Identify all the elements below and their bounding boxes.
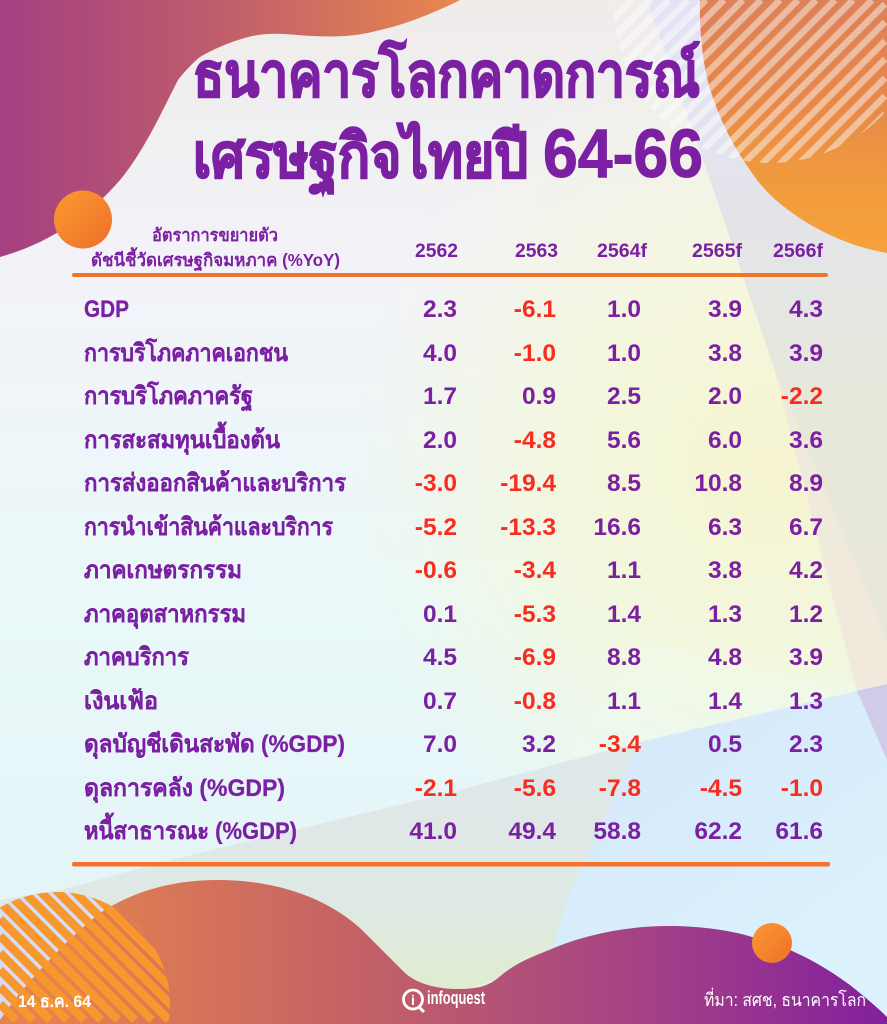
row: imports: -13.3 xyxy=(500,514,556,541)
row: capital formation: 3.6 xyxy=(789,427,823,454)
row: current account xyxy=(84,730,823,760)
row: exports xyxy=(84,470,823,497)
row: fiscal balance: -4.5 xyxy=(700,775,742,802)
row: industry: 1.3 xyxy=(708,601,742,628)
row: agriculture xyxy=(84,557,823,584)
row: industry: ภาคอุตสาหกรรม xyxy=(84,601,246,630)
decorative orange circle: bottom right xyxy=(752,923,792,963)
row: current account: 7.0 xyxy=(423,731,457,758)
header rule xyxy=(72,273,828,277)
row: current account: 3.2 xyxy=(522,731,556,758)
row: GDP: 4.3 xyxy=(789,296,823,323)
striped circle: top right xyxy=(614,0,887,163)
title: เศรษฐกิจไทยปี xyxy=(193,121,528,195)
row: imports: -5.2 xyxy=(415,514,457,541)
row: services: 3.9 xyxy=(789,644,823,671)
row: agriculture: -3.4 xyxy=(514,557,556,584)
table header: 2565f xyxy=(692,240,743,262)
row: GDP xyxy=(84,296,823,323)
row: services: 8.8 xyxy=(607,644,641,671)
row: capital formation: 2.0 xyxy=(423,427,457,454)
row: public debt: 58.8 xyxy=(593,818,641,845)
row: fiscal balance: ดุลการคลัง (%GDP) xyxy=(84,775,285,804)
logo: infoquest: i xyxy=(411,992,415,1008)
row: capital formation xyxy=(84,421,823,456)
row: private consumption: 3.9 xyxy=(789,340,823,367)
row: industry xyxy=(84,601,823,630)
row: private consumption xyxy=(84,338,823,367)
row: GDP: GDP xyxy=(84,296,129,323)
row: current account: -3.4 xyxy=(599,731,641,758)
row: current account: 0.5 xyxy=(708,731,742,758)
row: imports: 6.7 xyxy=(789,514,823,541)
row: GDP: 3.9 xyxy=(708,296,742,323)
row: services: 4.5 xyxy=(423,644,457,671)
title xyxy=(193,39,703,195)
title: 64-66 xyxy=(543,115,703,192)
table header: 2563 xyxy=(515,240,558,262)
row: exports: 8.9 xyxy=(789,470,823,497)
title: ธนาคารโลกคาดการณ์ xyxy=(193,39,700,109)
row: imports: 16.6 xyxy=(593,514,641,541)
footer rule xyxy=(72,862,830,866)
row: inflation: เงินเฟ้อ xyxy=(84,688,158,715)
row: agriculture: -0.6 xyxy=(415,557,457,584)
row: exports: -19.4 xyxy=(500,470,556,497)
row: fiscal balance: -5.6 xyxy=(514,775,556,802)
blob: bottom hills xyxy=(0,880,887,1024)
data table xyxy=(84,296,823,845)
row: inflation: -0.8 xyxy=(514,688,556,715)
row: agriculture: 1.1 xyxy=(607,557,641,584)
row: public debt: 61.6 xyxy=(775,818,823,845)
row: public consumption: การบริโภคภาครัฐ xyxy=(84,381,253,412)
row: exports: การส่งออกสินค้าและบริการ xyxy=(84,470,347,497)
row: public consumption: 2.5 xyxy=(607,383,641,410)
row: private consumption: 4.0 xyxy=(423,340,457,367)
decorative orange circle: left xyxy=(54,190,112,248)
row: current account: ดุลบัญชีเดินสะพัด (%GDP) xyxy=(84,730,345,760)
row: services: 4.8 xyxy=(708,644,742,671)
row: fiscal balance: -1.0 xyxy=(781,775,823,802)
logo: infoquest: infoquest xyxy=(427,988,485,1008)
row: private consumption: -1.0 xyxy=(514,340,556,367)
table header: ดัชนีชี้วัดเศรษฐกิจมหภาค (%YoY) xyxy=(91,247,340,272)
row: inflation: 1.4 xyxy=(708,688,742,715)
row: public consumption xyxy=(84,381,823,412)
row: public debt xyxy=(84,812,823,845)
row: imports: การนำเข้าสินค้าและบริการ xyxy=(84,514,334,541)
row: public consumption: 0.9 xyxy=(522,383,556,410)
blob: top-left gradient shape xyxy=(0,0,460,257)
striped circle: bottom left xyxy=(0,892,170,1023)
date: 14 ธ.ค. 64 xyxy=(18,992,91,1011)
row: GDP: -6.1 xyxy=(514,296,556,323)
row: public debt: 62.2 xyxy=(694,818,742,845)
row: agriculture: 4.2 xyxy=(789,557,823,584)
source: ที่มา: สศช, ธนาคารโลก xyxy=(704,987,866,1010)
row: imports xyxy=(84,514,823,541)
row: inflation: 1.1 xyxy=(607,688,641,715)
row: current account: 2.3 xyxy=(789,731,823,758)
row: GDP: 2.3 xyxy=(423,296,457,323)
table header: อัตราการขยายตัว xyxy=(152,225,278,245)
row: inflation xyxy=(84,688,823,715)
row: capital formation: -4.8 xyxy=(514,427,556,454)
row: inflation: 0.7 xyxy=(423,688,457,715)
blob: top-right orange shape xyxy=(700,0,887,253)
row: public consumption: 1.7 xyxy=(423,383,457,410)
row: private consumption: 3.8 xyxy=(708,340,742,367)
row: public consumption: -2.2 xyxy=(781,383,823,410)
row: services xyxy=(84,644,823,671)
row: industry: -5.3 xyxy=(514,601,556,628)
logo: infoquest xyxy=(404,988,485,1012)
row: private consumption: 1.0 xyxy=(607,340,641,367)
row: fiscal balance xyxy=(84,775,823,804)
row: capital formation: 6.0 xyxy=(708,427,742,454)
row: agriculture: ภาคเกษตรกรรม xyxy=(84,557,242,584)
row: exports: -3.0 xyxy=(415,470,457,497)
row: industry: 0.1 xyxy=(423,601,457,628)
row: imports: 6.3 xyxy=(708,514,742,541)
row: public debt: 41.0 xyxy=(409,818,457,845)
row: capital formation: การสะสมทุนเบื้องต้น xyxy=(84,421,280,456)
row: private consumption: การบริโภคภาคเอกชน xyxy=(84,338,288,367)
row: public debt: หนี้สาธารณะ (%GDP) xyxy=(84,812,297,845)
lavender disc behind bottom-left stripes xyxy=(0,892,170,1024)
row: GDP: 1.0 xyxy=(607,296,641,323)
row: exports: 8.5 xyxy=(607,470,641,497)
row: industry: 1.2 xyxy=(789,601,823,628)
row: agriculture: 3.8 xyxy=(708,557,742,584)
table header: 2562 xyxy=(415,240,458,262)
table header: 2564f xyxy=(597,240,648,262)
row: public debt: 49.4 xyxy=(508,818,556,845)
row: capital formation: 5.6 xyxy=(607,427,641,454)
row: exports: 10.8 xyxy=(694,470,742,497)
row: services: ภาคบริการ xyxy=(84,644,190,671)
table header: 2566f xyxy=(773,240,824,262)
table header xyxy=(91,225,824,272)
row: fiscal balance: -7.8 xyxy=(599,775,641,802)
row: public consumption: 2.0 xyxy=(708,383,742,410)
row: services: -6.9 xyxy=(514,644,556,671)
row: fiscal balance: -2.1 xyxy=(415,775,457,802)
row: inflation: 1.3 xyxy=(789,688,823,715)
row: industry: 1.4 xyxy=(607,601,641,628)
